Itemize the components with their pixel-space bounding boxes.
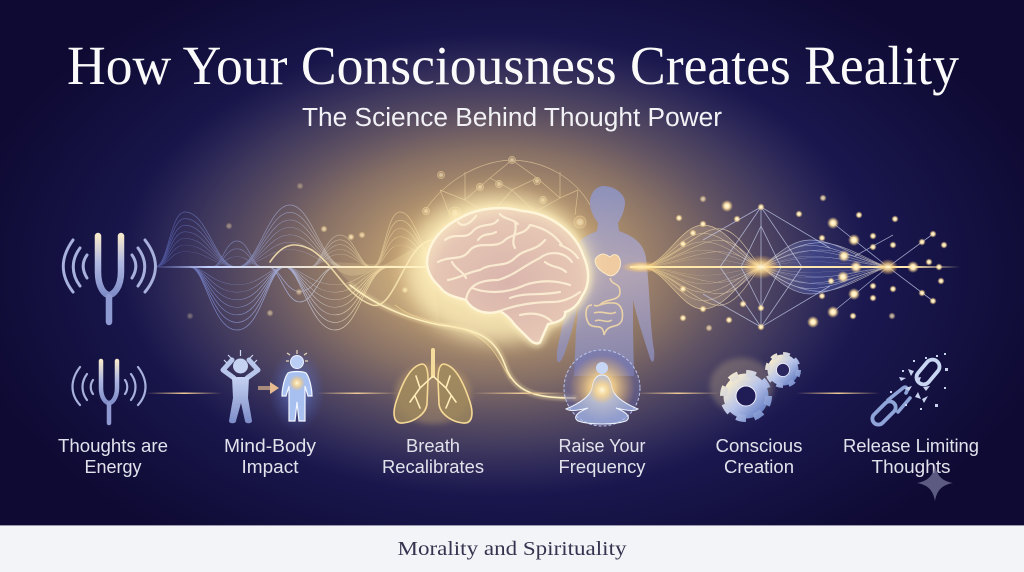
label: Release Limiting [843, 435, 979, 456]
right wave lens fill [640, 225, 887, 309]
label: Conscious [716, 435, 802, 456]
wave axis beam left [155, 266, 440, 268]
step 2: mind-body impact [223, 348, 325, 477]
sacred geometry diamond [703, 207, 933, 327]
icon: glowing brain [406, 194, 590, 343]
icon: broken chain [870, 357, 942, 427]
step 4: raise your frequency [558, 350, 646, 477]
icon: small gear [768, 354, 798, 386]
step 3: breath recalibrates: Recalibrates [382, 456, 484, 477]
icon: stressed figure [223, 350, 258, 423]
golden ribbon flowing to brain and meditator [270, 240, 575, 398]
footer text: Morality and Spirituality [398, 538, 627, 560]
step 5: conscious creation [710, 354, 802, 477]
large tuning fork icon [63, 236, 156, 322]
subtitle: The Science Behind Thought Power [302, 104, 723, 132]
glowing particles right [675, 194, 948, 332]
label: Thoughts are [58, 435, 168, 456]
warm wave strands near brain [310, 212, 435, 267]
wave axis beam right [621, 255, 960, 279]
label: Mind-Body [224, 435, 317, 456]
main wave: thought energy into brain [155, 205, 435, 330]
step 1: thoughts are energy [58, 361, 168, 477]
icon: chain sparks [890, 353, 948, 410]
step 5: conscious creation: Creation [724, 456, 794, 477]
icon: meditating figure in aura [564, 350, 640, 426]
blue wave strands above axis [155, 205, 345, 267]
step 6: release limiting thoughts [843, 353, 979, 477]
connecting timeline [146, 392, 880, 394]
label: Breath [406, 435, 460, 456]
step 3: breath recalibrates [382, 350, 484, 477]
icon: arrow [258, 382, 279, 394]
brain folds [438, 214, 580, 322]
icon: large gear [724, 374, 768, 418]
icon: calm glowing figure [282, 350, 312, 421]
footer band [0, 525, 1024, 572]
icon: heart [595, 254, 620, 276]
icon: lungs [394, 350, 472, 424]
icon: stomach and intestines [586, 278, 623, 335]
icon: human body with organs [557, 186, 654, 376]
wave strands below axis [190, 267, 390, 330]
label: Raise Your [558, 435, 646, 456]
title: How Your Consciousness Creates Reality [67, 36, 959, 97]
step 4: raise your frequency: Frequency [558, 456, 646, 477]
neural dome network above brain [422, 156, 590, 228]
icon: small tuning fork [72, 361, 146, 423]
floating particles left [186, 182, 409, 320]
step 1: thoughts are energy: Energy [84, 456, 142, 477]
right wave mesh [640, 225, 887, 309]
watermark sparkle [917, 465, 953, 501]
step 2: mind-body impact: Impact [242, 456, 298, 477]
step 6: release limiting thoughts: Thoughts [872, 456, 950, 477]
